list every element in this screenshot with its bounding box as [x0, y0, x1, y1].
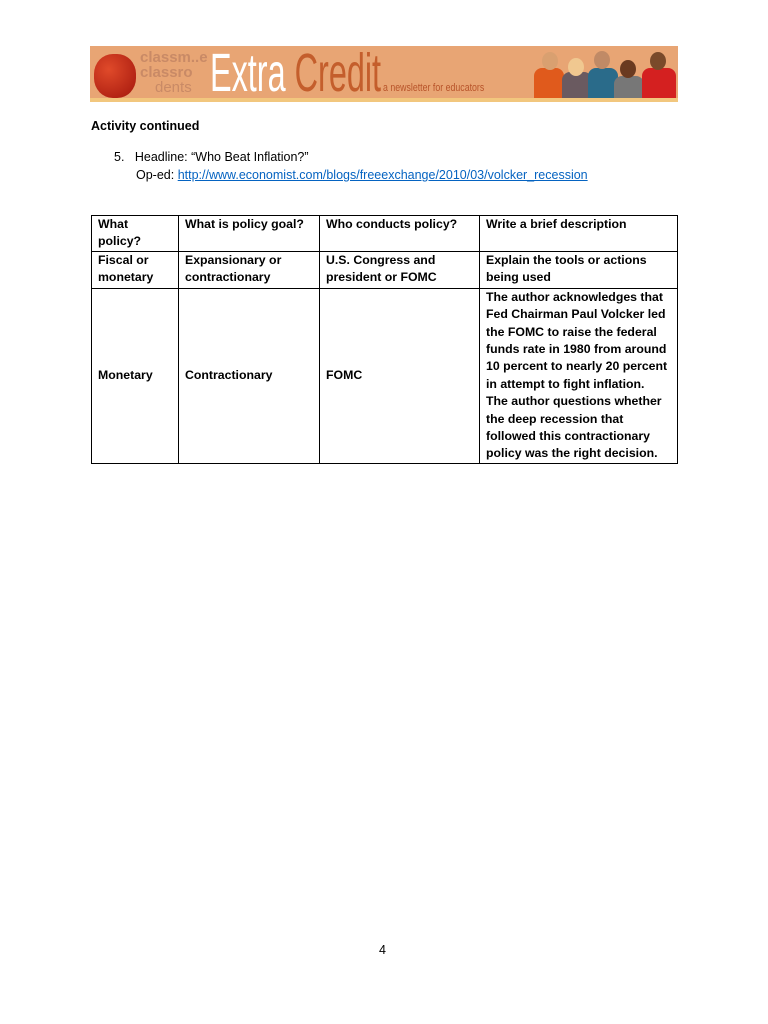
table: policy analysis: Monetary	[98, 368, 153, 382]
page number: 4	[379, 943, 386, 957]
students photo	[534, 51, 676, 98]
background words: classro	[140, 64, 193, 81]
banner	[90, 46, 678, 102]
heading: Activity continued: Activity continued	[91, 119, 199, 133]
background words: classm..e	[140, 49, 208, 66]
table: policy analysis: Contractionary	[185, 368, 272, 382]
table: policy analysis: The author acknowledges that Fed Chairman Paul Volcker led the FOMC to raise the federal funds rate in 1980 from around 10 percent to nearly 20 percent in attempt to fight inflation.	[486, 290, 667, 391]
table: policy analysis: Write a brief description	[486, 217, 627, 231]
table: policy analysis: The author questions whether the deep recession that followed this contractionary policy was the right decision.	[486, 394, 662, 460]
background words: dents	[155, 79, 192, 96]
table: policy analysis: What is policy goal?	[185, 217, 304, 231]
table: policy analysis: FOMC	[326, 368, 362, 382]
table: policy analysis: Explain the tools or actions being used	[486, 253, 647, 284]
list item 5: 5. Headline: “Who Beat Inflation?”	[114, 150, 309, 164]
background words	[140, 49, 208, 96]
list item 5: Op-ed: http://www.economist.com/blogs/freeexchange/2010/03/volcker_recession	[136, 168, 588, 182]
icon: apple	[94, 54, 136, 98]
table: policy analysis: Expansionary or contractionary	[185, 253, 281, 284]
subtitle: a newsletter for educators	[383, 82, 484, 94]
table: policy analysis	[91, 215, 678, 464]
table: policy analysis: U.S. Congress and president or FOMC	[326, 253, 437, 284]
list item 5	[114, 150, 588, 182]
table: policy analysis: Who conducts policy?	[326, 217, 457, 231]
table: policy analysis: What policy?	[98, 217, 141, 248]
table: policy analysis: Fiscal or monetary	[98, 253, 153, 284]
